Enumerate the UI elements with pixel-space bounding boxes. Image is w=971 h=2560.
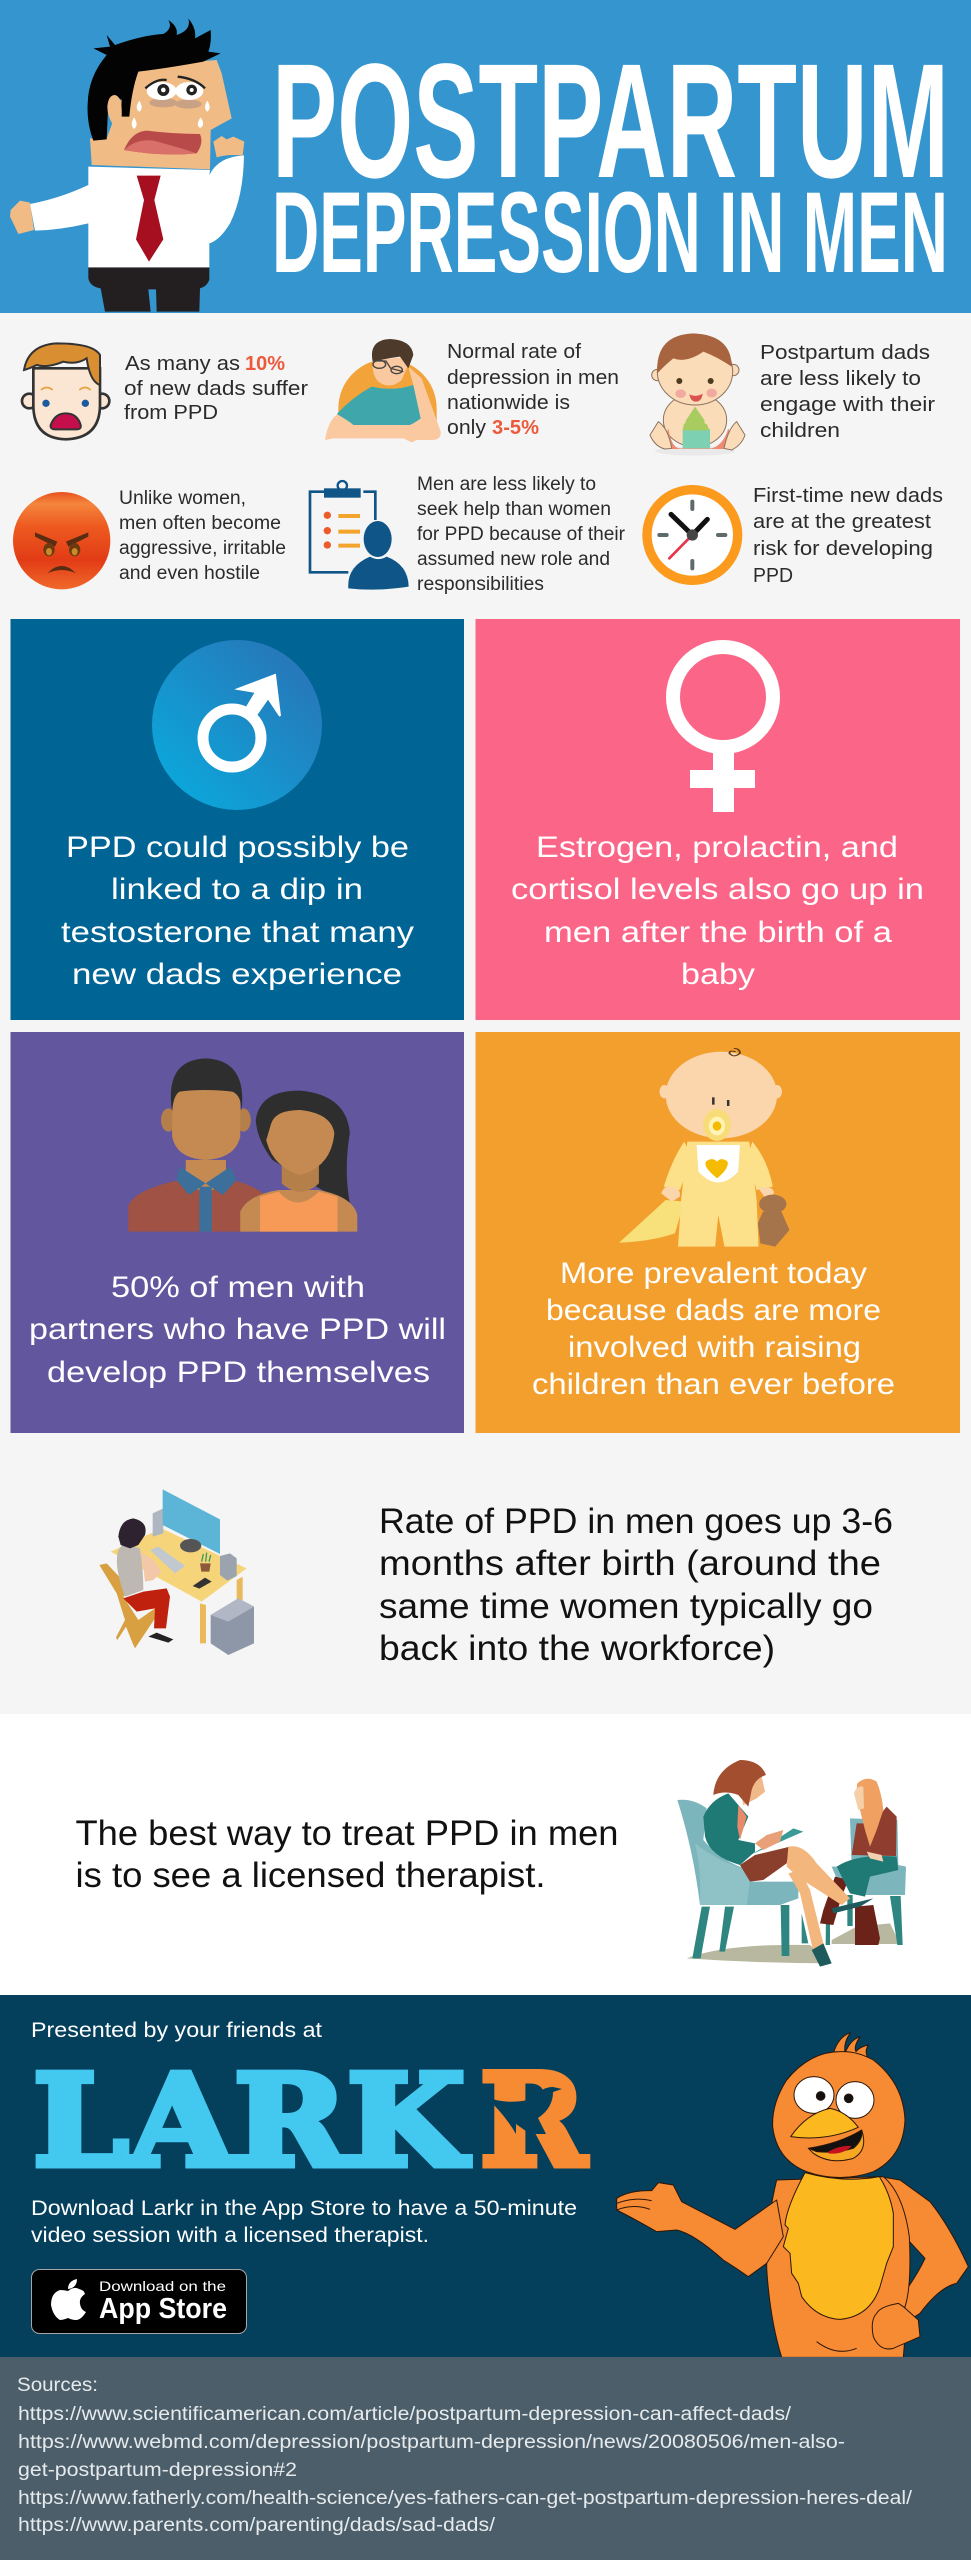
- stat: first-time dads: risk for developing: [753, 538, 933, 560]
- icon: clock: [642, 485, 742, 585]
- source list: https://www.scientificamerican.com/article/postpartum-depression-can-affect-dads/: [18, 2404, 792, 2425]
- text: baby: [681, 958, 755, 991]
- text: Download Larkr in the App Store to have a 50-minute: [31, 2197, 577, 2220]
- text: [31, 2197, 577, 2247]
- illustration: therapist and client: [677, 1760, 906, 1967]
- stat: less likely to seek help: for PPD because of their: [417, 524, 626, 545]
- stat: aggressive: and even hostile: [119, 563, 260, 584]
- text: 50% of men with: [111, 1271, 365, 1304]
- panel: partners: [10, 1032, 464, 1433]
- header banner: [0, 0, 971, 313]
- stat: less likely to seek help: responsibilities: [417, 574, 544, 595]
- stat: less likely to engage: children: [760, 420, 840, 442]
- app store button: [32, 2270, 246, 2334]
- illustration: person at desk: [99, 1489, 254, 1655]
- illustration: couple: [128, 1058, 357, 1232]
- source list: get-postpartum-depression#2: [18, 2460, 297, 2481]
- text: men after the birth of a: [544, 916, 892, 949]
- text: testosterone that many: [61, 916, 414, 949]
- section: presented by Larkr: [0, 1995, 971, 2357]
- stat: normal rate: Normal rate of: [447, 341, 581, 363]
- text: is to see a licensed therapist.: [76, 1856, 546, 1895]
- app store button: Download on the: [99, 2278, 226, 2294]
- stat: normal rate: [447, 341, 619, 439]
- text: The best way to treat PPD in men: [76, 1814, 618, 1853]
- stat: first-time dads: First-time new dads: [753, 485, 943, 507]
- text: partners who have PPD will: [29, 1313, 446, 1346]
- stat: normal rate: only: [447, 417, 486, 439]
- text: [61, 831, 414, 991]
- panel: more prevalent today: [476, 1032, 960, 1433]
- stat: less likely to seek help: seek help than women: [417, 499, 611, 520]
- icon: angry face: [13, 492, 110, 589]
- text: Presented by your friends at: [31, 2019, 322, 2042]
- icon: male symbol: [152, 640, 322, 810]
- text: Estrogen, prolactin, and: [536, 831, 898, 864]
- source list: https://www.parents.com/parenting/dads/sad-dads/: [18, 2515, 496, 2536]
- text: video session with a licensed therapist.: [31, 2224, 429, 2247]
- stat: less likely to engage: are less likely to: [760, 368, 921, 390]
- source list: [18, 2404, 913, 2536]
- text: [532, 1257, 895, 1401]
- text: back into the workforce): [379, 1629, 775, 1668]
- stat: less likely to seek help: assumed new role and: [417, 549, 610, 570]
- text: cortisol levels also go up in: [511, 873, 924, 906]
- stat: aggressive: Unlike women,: [119, 488, 246, 509]
- icon: upset boy face: [22, 343, 109, 439]
- stat: less likely to seek help: [417, 474, 626, 595]
- text: because dads are more: [546, 1294, 881, 1327]
- stat: less likely to engage: engage with their: [760, 394, 935, 416]
- text: [379, 1502, 893, 1668]
- panel: hormones: [476, 619, 960, 1020]
- illustration: orange bird mascot: [617, 2033, 968, 2357]
- text: children than ever before: [532, 1368, 895, 1401]
- text: linked to a dip in: [111, 873, 363, 906]
- icon: depressed man with head in hand: [325, 339, 441, 442]
- illustration: crying man: [10, 18, 244, 312]
- Larkr logo: R: [480, 2047, 587, 2195]
- stat: aggressive: men often become: [119, 513, 281, 534]
- icon: baby with bottle: [650, 333, 745, 456]
- stat: 10 percent: 10%: [245, 353, 285, 375]
- text: same time women typically go: [379, 1587, 873, 1626]
- icon: apple: [51, 2279, 86, 2320]
- illustration: baby with pacifier: [619, 1048, 789, 1247]
- text: months after birth (around the: [379, 1544, 881, 1583]
- stat: normal rate: nationwide is: [447, 392, 570, 414]
- stat: normal rate: depression in men: [447, 367, 619, 389]
- stat: first-time dads: are at the greatest: [753, 511, 931, 533]
- stat: first-time dads: [753, 485, 943, 587]
- stat: less likely to seek help: Men are less likely to: [417, 474, 596, 495]
- section: sources: [0, 2357, 971, 2560]
- panel: testosterone: [10, 619, 464, 1020]
- stat: normal rate: 3-5%: [492, 417, 539, 439]
- text: Rate of PPD in men goes up 3-6: [379, 1502, 893, 1541]
- stat: less likely to engage: [760, 342, 935, 442]
- source list: https://www.webmd.com/depression/postpartum-depression/news/20080506/men-also-: [18, 2432, 845, 2453]
- text: [29, 1271, 446, 1389]
- stats grid: [13, 333, 943, 595]
- text: PPD could possibly be: [66, 831, 409, 864]
- text: develop PPD themselves: [47, 1356, 430, 1389]
- sources heading: Sources:: [17, 2375, 98, 2396]
- icon: female symbol: [673, 647, 773, 812]
- stat: first-time dads: PPD: [753, 565, 793, 587]
- text: [511, 831, 924, 991]
- stat: aggressive: aggressive, irritable: [119, 538, 286, 559]
- stat: 10 percent: of new dads suffer: [124, 378, 308, 400]
- text: involved with raising: [568, 1331, 861, 1364]
- stat: 10 percent: from PPD: [124, 402, 218, 424]
- section: best treatment: [0, 1714, 971, 1995]
- stat: less likely to engage: Postpartum dads: [760, 342, 930, 364]
- app store button: App Store: [99, 2293, 227, 2325]
- text: More prevalent today: [560, 1257, 867, 1290]
- stat: aggressive: [119, 488, 286, 584]
- icon: clipboard and person: [310, 481, 409, 590]
- text: [76, 1814, 618, 1895]
- source list: https://www.fatherly.com/health-science/yes-fathers-can-get-postpartum-depression-heres-deal/: [18, 2488, 913, 2509]
- stat: 10 percent: As many as: [125, 353, 240, 375]
- stat: 10 percent: [124, 353, 308, 424]
- Larkr logo: LARK: [33, 2047, 470, 2195]
- text: new dads experience: [72, 958, 402, 991]
- section: timing of PPD: [0, 1433, 971, 1714]
